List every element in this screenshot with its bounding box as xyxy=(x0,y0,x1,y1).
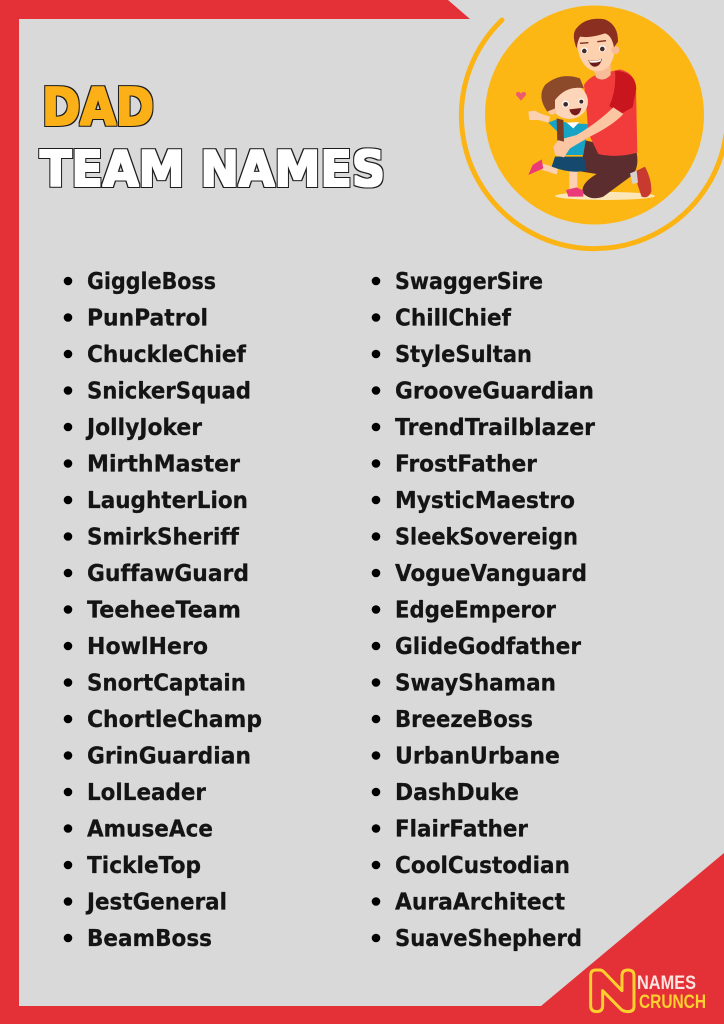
logo: Names Crunch xyxy=(591,970,706,1013)
dad trousers xyxy=(582,140,637,198)
right column list: SleekSovereign xyxy=(395,524,578,550)
dad neck xyxy=(593,60,611,80)
right column list: SuaveShepherd xyxy=(395,926,582,952)
left column list: BeamBoss xyxy=(87,926,212,952)
girl shoes xyxy=(528,159,543,175)
logo text: NAMES: NAMES xyxy=(637,973,696,994)
girl face xyxy=(551,84,588,119)
figures xyxy=(516,19,655,200)
right column list: EdgeEmperor xyxy=(395,598,557,624)
left column list: GiggleBoss xyxy=(87,269,216,295)
left column list: JestGeneral xyxy=(85,890,227,916)
dad arm xyxy=(553,107,623,157)
girl arm wave xyxy=(528,111,550,123)
right column list: StyleSultan xyxy=(395,342,532,368)
girl legs xyxy=(541,163,558,175)
right column list: MysticMaestro xyxy=(395,488,575,514)
left column list: GuffawGuard xyxy=(87,561,249,587)
left column list: ChuckleChief xyxy=(87,342,247,368)
heading: TEAM NAMES: TEAM NAMES xyxy=(40,141,385,198)
icon: N mark xyxy=(591,970,634,1012)
right column list: UrbanUrbane xyxy=(395,744,560,770)
right column list: FlairFather xyxy=(395,816,529,842)
right column list: SwayShaman xyxy=(395,670,556,696)
left column list: SnickerSquad xyxy=(87,378,251,404)
left column list: TickleTop xyxy=(87,853,201,879)
girl eyes and mouth xyxy=(562,101,569,107)
girl skirt xyxy=(552,157,587,172)
left column list: ChortleChamp xyxy=(87,707,262,733)
right column list: GlideGodfather xyxy=(395,634,582,660)
left column list: SmirkSheriff xyxy=(87,524,240,550)
left column list xyxy=(64,269,262,952)
right column list: VogueVanguard xyxy=(395,561,587,587)
left column list: MirthMaster xyxy=(87,452,241,478)
heading: DAD: DAD xyxy=(42,78,154,138)
girl shirt xyxy=(548,119,588,155)
left column list: AmuseAce xyxy=(87,816,213,842)
right column list: TrendTrailblazer xyxy=(395,415,596,441)
left column list: JollyJoker xyxy=(85,415,203,441)
left column list: SnortCaptain xyxy=(87,670,246,696)
right column list xyxy=(372,269,596,952)
title xyxy=(40,78,385,198)
yellow circle xyxy=(485,6,704,224)
dad shoe xyxy=(635,167,651,197)
yellow ring xyxy=(461,20,724,249)
dad face xyxy=(577,29,615,71)
dad shirt xyxy=(584,69,637,156)
left column list: HowlHero xyxy=(87,634,208,660)
right column list: AuraArchitect xyxy=(395,890,565,916)
logo text: CRUNCH: CRUNCH xyxy=(639,992,706,1013)
right column list: CoolCustodian xyxy=(395,853,570,879)
girl hair xyxy=(541,76,584,112)
dad eyes, brows and mouth xyxy=(581,47,588,54)
left column list: PunPatrol xyxy=(87,306,208,332)
ground shadow xyxy=(555,192,655,200)
right column list: ChillChief xyxy=(395,306,512,332)
right column list: SwaggerSire xyxy=(395,269,543,295)
heart xyxy=(516,92,526,101)
right column list: FrostFather xyxy=(395,452,538,478)
right column list: GrooveGuardian xyxy=(395,378,594,404)
right column list: BreezeBoss xyxy=(395,707,533,733)
left column list: GrinGuardian xyxy=(87,744,251,770)
dad sleeve xyxy=(609,71,636,114)
illustration: dad and daughter xyxy=(461,6,724,249)
left column list: TeeheeTeam xyxy=(87,598,241,624)
left column list: LaughterLion xyxy=(87,488,248,514)
left column list: LolLeader xyxy=(87,780,207,806)
right column list: DashDuke xyxy=(395,780,519,806)
dad hair xyxy=(574,19,618,48)
